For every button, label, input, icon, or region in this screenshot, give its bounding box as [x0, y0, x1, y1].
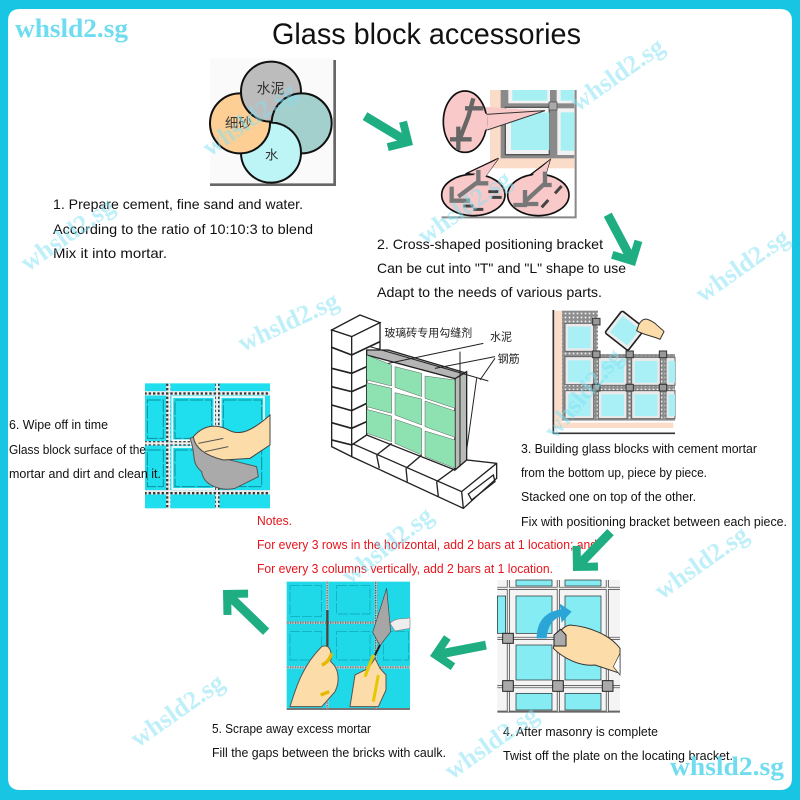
notes: For every 3 columns vertically, add 2 bars at 1 location.	[257, 562, 553, 576]
text: step 4	[503, 725, 733, 763]
label: rebar: 钢筋	[498, 352, 520, 366]
watermarks: whsld2.sg	[649, 519, 754, 605]
text: step 3: Fix with positioning bracket between each piece.	[521, 515, 787, 529]
watermark: top left: whsld2.sg	[15, 14, 128, 43]
text: step 6: mortar and dirt and clean it.	[9, 467, 161, 481]
watermarks: whsld2.sg	[197, 76, 302, 162]
text: step 2	[377, 236, 626, 300]
notes: For every 3 rows in the horizontal, add 2 bars at 1 location; and	[257, 538, 597, 552]
arrow 2	[592, 206, 651, 274]
watermarks: whsld2.sg	[439, 699, 544, 785]
panel: wall cross-section diagram	[332, 315, 520, 508]
text: step 3: 3. Building glass blocks with cement mortar	[521, 442, 757, 456]
notes: Notes.	[257, 514, 292, 528]
watermarks: whsld2.sg	[565, 31, 670, 117]
watermarks: whsld2.sg	[125, 667, 230, 753]
text: step 3: Stacked one on top of the other.	[521, 490, 696, 504]
label: joint agent: 玻璃砖专用勾缝剂	[384, 326, 472, 340]
arrow 5	[211, 577, 278, 644]
text: step 2: Adapt to the needs of various parts.	[377, 284, 602, 300]
watermarks: whsld2.sg	[233, 286, 343, 357]
watermarks: whsld2.sg	[15, 191, 120, 277]
watermarks: whsld2.sg	[336, 501, 439, 590]
label: fine sand: 细砂	[225, 115, 252, 130]
watermarks: whsld2.sg	[537, 343, 629, 444]
text: step 6: 6. Wipe off in time	[9, 418, 108, 432]
label: cement: 水泥	[257, 80, 285, 96]
text: step 3	[521, 442, 787, 529]
text: step 1: 1. Prepare cement, fine sand and water.	[53, 196, 303, 212]
label: water: 水	[265, 147, 278, 162]
panel: step 4 twisting bracket	[497, 580, 620, 712]
label: cement: 水泥	[490, 331, 512, 344]
watermarks: whsld2.sg	[412, 164, 517, 250]
arrow 1	[356, 101, 422, 160]
panel: step 5 scraping mortar	[287, 582, 410, 709]
text: step 4: 4. After masonry is complete	[503, 725, 658, 739]
panel: step 3 laying blocks	[552, 310, 675, 437]
text: step 6	[9, 418, 161, 481]
arrow 3	[560, 520, 623, 583]
text: step 1: According to the ratio of 10:10:3 to blend	[53, 221, 313, 237]
text: step 5: 5. Scrape away excess mortar	[212, 722, 371, 736]
panel: step 6 wiping	[145, 383, 270, 508]
text: step 2: Can be cut into "T" and "L" shape to use	[377, 260, 626, 276]
text: step 1: Mix it into mortar.	[53, 245, 167, 261]
text: step 5: Fill the gaps between the bricks with caulk.	[212, 746, 446, 760]
text: step 2: 2. Cross-shaped positioning bracket	[377, 236, 603, 252]
arrow 4	[427, 628, 489, 673]
panel: step 2 bracket diagram	[442, 90, 576, 217]
text: step 6: Glass block surface of the	[9, 443, 146, 457]
notes	[257, 514, 597, 576]
text: step 1	[53, 196, 313, 261]
text: step 5	[212, 722, 446, 760]
text: step 4: Twist off the plate on the locating bracket.	[503, 749, 733, 763]
watermarks: whsld2.sg	[690, 222, 795, 308]
watermark: bottom right: whsld2.sg	[670, 752, 784, 781]
panel: step 1 mixing diagram	[210, 58, 335, 185]
title: Glass block accessories	[272, 18, 581, 51]
text: step 3: from the bottom up, piece by piece.	[521, 466, 707, 480]
